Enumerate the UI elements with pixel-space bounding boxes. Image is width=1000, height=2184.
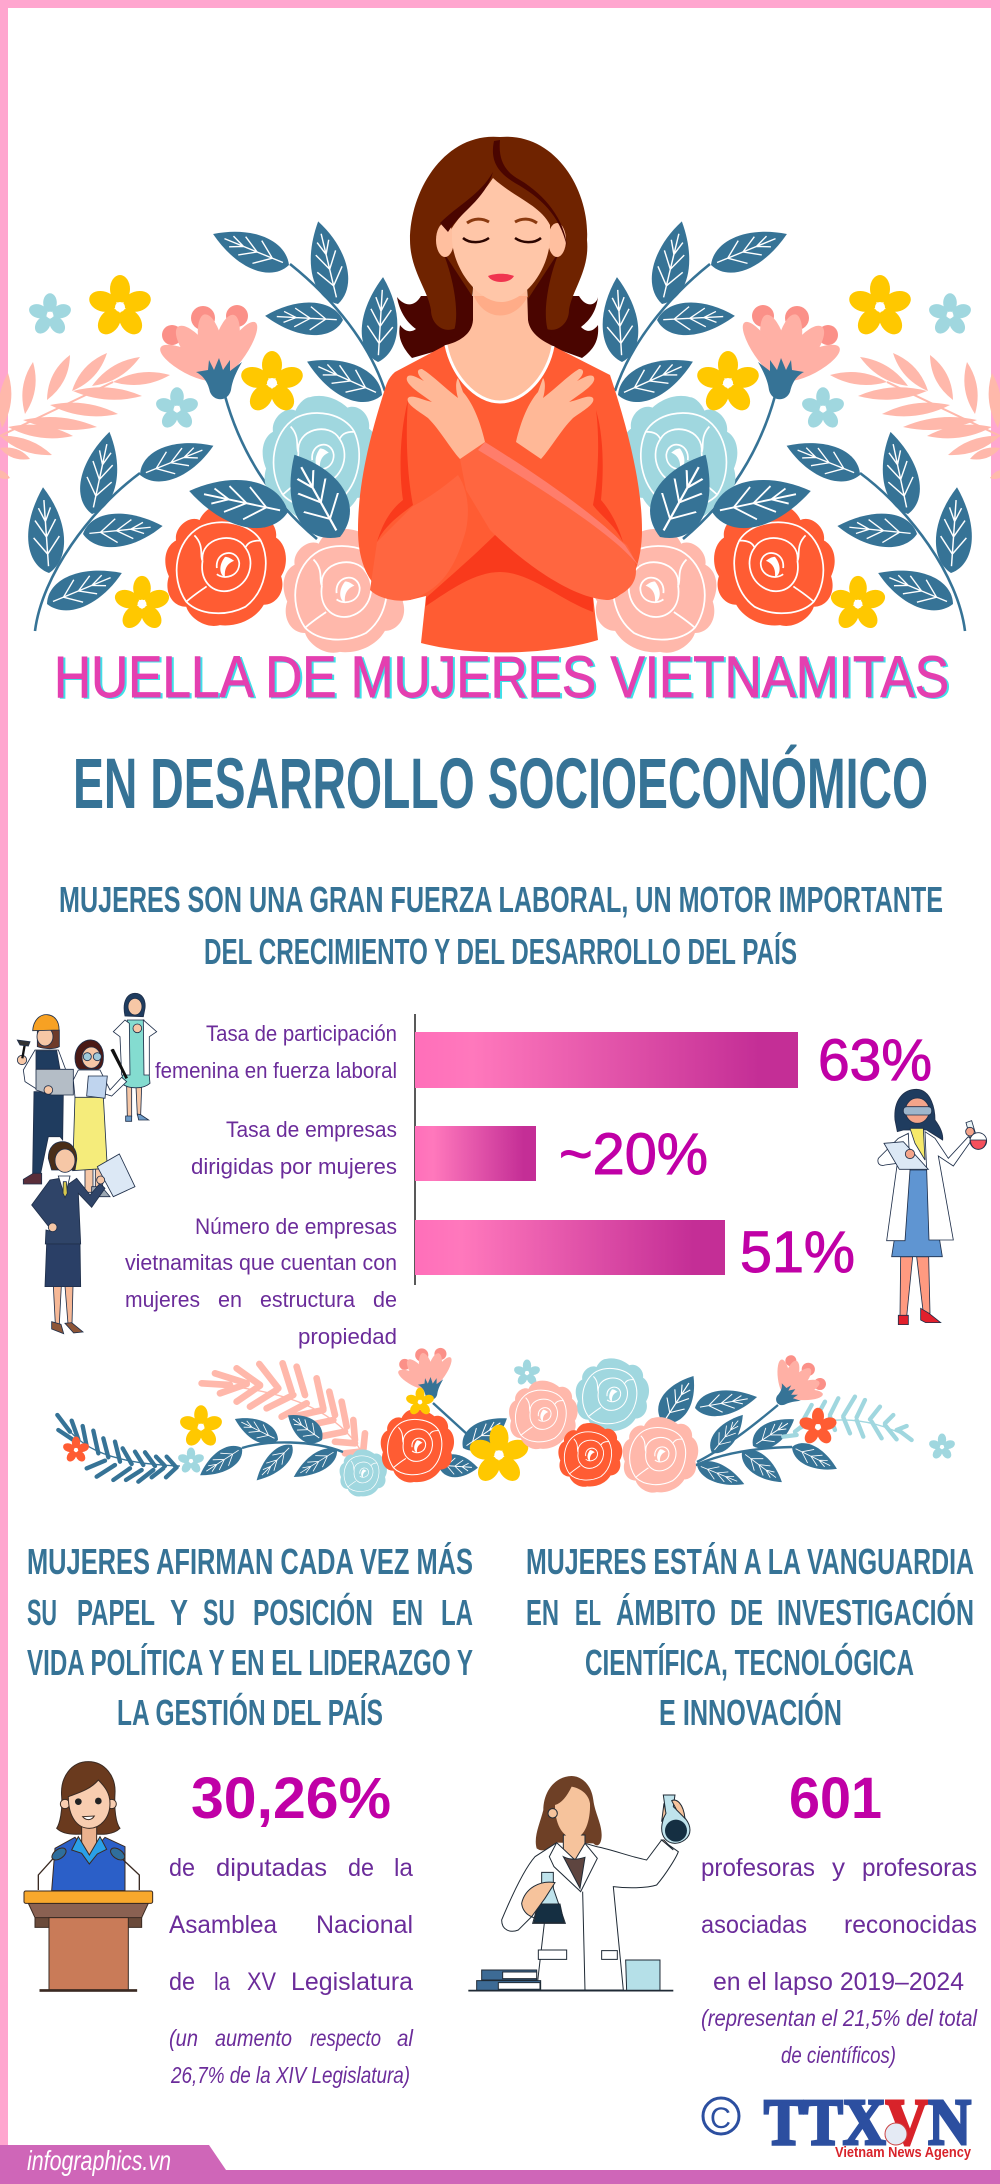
garland: light blue fern bbox=[783, 1397, 912, 1440]
logo: copyright TTXVN: Vietnam News Agency bbox=[835, 2144, 972, 2161]
footer bar with tab bbox=[0, 2145, 1000, 2184]
text block: deputies bbox=[169, 1854, 413, 1996]
bar: 20% bbox=[415, 1126, 536, 1181]
value: 20%: ~20% bbox=[559, 1122, 708, 1187]
section heading: politics: LA GESTIÓN DEL PAÍS bbox=[117, 1691, 383, 1733]
chart label: ownership: vietnamitas que cuentan con bbox=[125, 1250, 397, 1275]
illustration: group of working women bbox=[17, 993, 157, 1334]
text block: professors: profesoras bbox=[862, 1854, 977, 1882]
bar: 63% bbox=[415, 1032, 798, 1088]
section heading: science: EN bbox=[526, 1592, 559, 1633]
chart label: participation rate bbox=[155, 1021, 397, 1083]
chart label: companies led by women: Tasa de empresas bbox=[226, 1117, 397, 1142]
section heading: politics: SU bbox=[203, 1592, 235, 1633]
section heading: politics bbox=[27, 1541, 473, 1733]
value: 51%: 51% bbox=[740, 1220, 855, 1285]
text block: professors: en el lapso 2019–2024 bbox=[713, 1968, 964, 1996]
note: deputies increase: 26,7% de la XIV Legislatura) bbox=[170, 2062, 410, 2088]
note: deputies increase: respecto bbox=[310, 2025, 381, 2051]
chart label: ownership: propiedad bbox=[298, 1324, 397, 1349]
text block: deputies: Asamblea bbox=[169, 1911, 277, 1939]
figure: builder bbox=[17, 1015, 73, 1184]
section heading: politics: Y bbox=[170, 1592, 188, 1633]
chart label: companies led by women: dirigidas por mujeres bbox=[191, 1154, 397, 1179]
note: deputies increase: aumento bbox=[215, 2025, 292, 2051]
note: deputies increase: (un bbox=[169, 2025, 198, 2051]
section heading: science bbox=[526, 1541, 974, 1733]
illustration: woman with crossed arms bbox=[358, 137, 642, 652]
text block: professors: reconocidas bbox=[844, 1911, 977, 1939]
bar chart bbox=[415, 1014, 932, 1285]
stat: 30,26%: 30,26% bbox=[191, 1766, 391, 1831]
chart label: ownership: en bbox=[218, 1287, 242, 1312]
text block: deputies: de bbox=[169, 1968, 195, 1996]
section heading: science: ÁMBITO bbox=[616, 1592, 716, 1633]
text block: deputies: XV bbox=[247, 1968, 276, 1996]
note: share of scientists bbox=[701, 2005, 978, 2068]
section heading: politics: VIDA POLÍTICA Y EN EL LIDERAZGO Y bbox=[27, 1642, 473, 1683]
text block: professors: profesoras bbox=[701, 1854, 815, 1882]
illustration: scientist at table bbox=[468, 1776, 690, 1991]
text block: professors: asociadas bbox=[701, 1911, 807, 1939]
text block: deputies: la bbox=[394, 1854, 413, 1882]
note: share of scientists: de científicos) bbox=[781, 2042, 896, 2068]
text block: deputies: la bbox=[214, 1968, 230, 1996]
text block: deputies: de bbox=[169, 1854, 195, 1882]
garland: teal fern bbox=[57, 1415, 180, 1482]
note: deputies increase bbox=[169, 2025, 414, 2088]
section heading: politics: POSICIÓN bbox=[253, 1591, 373, 1633]
illustration: scientist with flask bbox=[878, 1089, 987, 1325]
chart label: companies led by women bbox=[191, 1117, 397, 1179]
illustration: floral garland bbox=[57, 1344, 956, 1497]
value: 63%: 63% bbox=[818, 1028, 932, 1093]
figure: woman in suit bbox=[32, 1142, 135, 1334]
illustration: left floral cluster bbox=[0, 217, 408, 653]
section heading: science: EL bbox=[575, 1592, 601, 1633]
text block: deputies: diputadas bbox=[216, 1854, 327, 1882]
chart label: ownership bbox=[125, 1214, 397, 1349]
bar: 51% bbox=[415, 1220, 725, 1275]
section heading: science: E INNOVACIÓN bbox=[659, 1691, 842, 1733]
chart label: ownership: Número de empresas bbox=[195, 1214, 397, 1239]
section heading: politics: LA bbox=[441, 1592, 473, 1633]
text block: deputies: Nacional bbox=[316, 1911, 413, 1939]
chart label: ownership: estructura bbox=[260, 1287, 356, 1312]
section heading: politics: SU bbox=[27, 1592, 57, 1633]
chart label: ownership: mujeres bbox=[125, 1287, 200, 1312]
chart label: participation rate: femenina en fuerza laboral bbox=[155, 1058, 397, 1083]
section heading: labor force bbox=[59, 879, 943, 972]
illustration: right floral cluster bbox=[592, 217, 1000, 653]
illustration: woman at podium bbox=[24, 1762, 153, 1991]
text block: deputies: Legislatura bbox=[291, 1968, 413, 1996]
figure: woman in yellow skirt bbox=[73, 1040, 127, 1197]
section heading: politics: MUJERES AFIRMAN CADA VEZ MÁS bbox=[27, 1541, 473, 1582]
figure: doctor bbox=[112, 993, 157, 1121]
garland: pink fern bbox=[200, 1363, 365, 1453]
stat: 601: 601 bbox=[789, 1766, 882, 1831]
logo: copyright TTXVN: TTXVN bbox=[764, 2086, 971, 2159]
section heading: science: DE bbox=[730, 1592, 763, 1633]
footer: source text: infographics.vn bbox=[27, 2145, 171, 2176]
note: deputies increase: al bbox=[397, 2025, 414, 2051]
logo: copyright TTXVN: C bbox=[710, 2102, 731, 2135]
section heading: politics: PAPEL bbox=[77, 1592, 155, 1633]
chart label: ownership: de bbox=[373, 1287, 397, 1312]
text block: professors: y bbox=[832, 1854, 846, 1882]
text block: professors bbox=[701, 1854, 977, 1996]
chart label: participation rate: Tasa de participación bbox=[206, 1021, 397, 1046]
text block: deputies: de bbox=[348, 1854, 374, 1882]
section heading: politics: EN bbox=[392, 1592, 423, 1633]
